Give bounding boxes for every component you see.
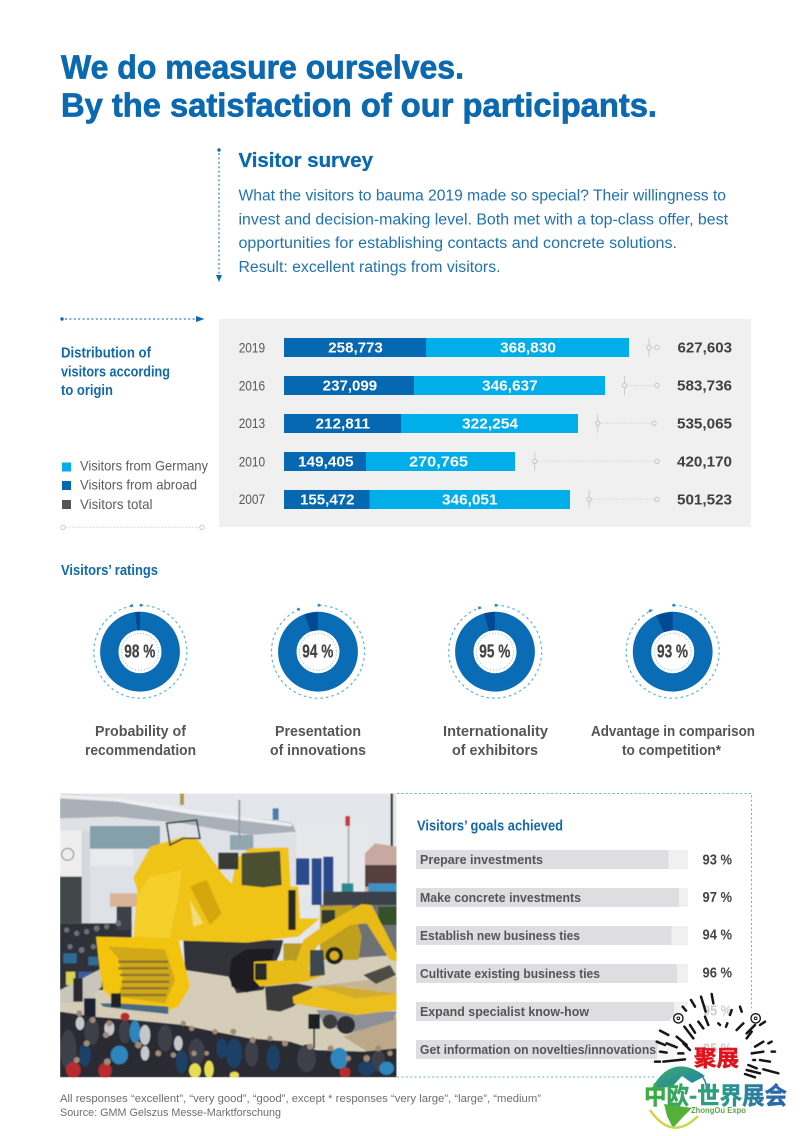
legend: Visitors from Germany bbox=[80, 458, 208, 474]
goal: information on novelties: Get information on novelties/innovations bbox=[420, 1042, 656, 1057]
goal: make concrete investments: 97 % bbox=[702, 889, 732, 906]
footnote: Source: GMM Gelszus Messe-Marktforschung bbox=[60, 1107, 281, 1119]
goal: expand specialist know-how: 95 % bbox=[703, 1003, 732, 1020]
bar row 2016: 237,099 bbox=[323, 378, 377, 395]
donut: 94% bbox=[270, 604, 366, 759]
heading: visitor survey: Visitor survey bbox=[238, 149, 374, 172]
body text: opportunities for establishing contacts and concrete solutions. bbox=[238, 235, 677, 252]
bar row 2013: 2013 bbox=[239, 415, 265, 431]
watermark: ZhongOu Expo logo: ZhongOu Expo bbox=[691, 1105, 746, 1115]
bar row 2007: 155,472 bbox=[300, 492, 354, 509]
bar row 2013: 322,254 bbox=[462, 416, 519, 433]
heading: visitors' ratings: Visitors’ ratings bbox=[61, 563, 158, 579]
bar row 2007: 501,523 bbox=[677, 492, 732, 509]
goal: prepare investments bbox=[416, 850, 732, 869]
heading: goals: Visitors’ goals achieved bbox=[417, 819, 563, 835]
heading: distribution of visitors: to origin bbox=[61, 383, 113, 399]
arrow: vertical dotted bbox=[216, 148, 222, 282]
bar row 2010: 420,170 bbox=[677, 454, 732, 471]
panel: bar chart of visitors bbox=[219, 319, 751, 527]
bar row 2007: 346,051 bbox=[442, 492, 498, 509]
goal: prepare investments: 93 % bbox=[702, 852, 732, 869]
title: By the satisfaction of our participants. bbox=[61, 86, 657, 124]
bar row 2016: 346,637 bbox=[482, 378, 538, 395]
donut: 94%: 94 % bbox=[302, 642, 333, 662]
bar row 2019: 258,773 bbox=[328, 340, 383, 357]
legend: Visitors total bbox=[80, 496, 152, 512]
goal: cultivate existing business ties: 96 % bbox=[702, 965, 732, 982]
body text: What the visitors to bauma 2019 made so special? Their willingness to bbox=[238, 188, 726, 205]
trailer bbox=[317, 1010, 397, 1033]
title: We do measure ourselves. bbox=[61, 48, 464, 86]
goal: establish new business ties: Establish new business ties bbox=[420, 928, 580, 943]
bar row 2016: 2016 bbox=[239, 377, 265, 393]
goal: cultivate existing business ties bbox=[416, 964, 732, 983]
donut: 98%: recommendation bbox=[85, 743, 196, 759]
bar row 2010 bbox=[239, 452, 732, 471]
text block: visitor survey bbox=[238, 149, 729, 276]
bar row 2016: 583,736 bbox=[677, 378, 732, 395]
donut: 93% bbox=[591, 604, 755, 759]
heading: distribution of visitors: Distribution of bbox=[61, 345, 151, 361]
donut: 95% bbox=[443, 604, 548, 759]
bar row 2019: 368,830 bbox=[500, 340, 556, 357]
donut: 94%: Presentation bbox=[275, 724, 361, 740]
donut: 95%: of exhibitors bbox=[452, 743, 538, 759]
bar row 2019: 627,603 bbox=[678, 340, 732, 357]
photo: yellow excavators and crowd bbox=[60, 793, 397, 1079]
bar row 2010: 2010 bbox=[239, 453, 265, 469]
watermark: ZhongOu Expo logo: 中欧-世界展会 bbox=[644, 1076, 787, 1111]
bar row 2013 bbox=[239, 414, 732, 433]
donut: 95%: 95 % bbox=[479, 642, 510, 662]
left crowd bbox=[60, 923, 132, 990]
main excavator bbox=[183, 940, 283, 993]
heading: distribution of visitors bbox=[61, 345, 170, 399]
donut: 93%: 93 % bbox=[657, 642, 688, 662]
bar row 2010: 149,405 bbox=[298, 454, 354, 471]
donut: 93%: to competition* bbox=[622, 743, 721, 759]
footnote: All responses “excellent”, “very good”, “good”, except * responses “very large”, “large”, “medium” bbox=[60, 1093, 541, 1105]
ground bbox=[60, 955, 397, 1057]
bar row 2010: 270,765 bbox=[409, 454, 468, 471]
watermark: radial code badge: 聚展 bbox=[694, 1041, 739, 1073]
goal: expand specialist know-how bbox=[416, 1002, 732, 1021]
donut: 98% bbox=[85, 604, 196, 759]
goal: establish new business ties bbox=[416, 926, 732, 945]
small excavator bbox=[265, 983, 313, 1012]
donut: 94%: of innovations bbox=[270, 743, 366, 759]
watermark: ZhongOu Expo logo bbox=[644, 1066, 788, 1128]
goal: prepare investments: Prepare investments bbox=[420, 852, 543, 867]
arrow: horizontal dotted bbox=[60, 316, 204, 322]
goal: make concrete investments: Make concrete investments bbox=[420, 890, 581, 905]
donut: 98%: 98 % bbox=[124, 642, 155, 662]
goal: information on novelties bbox=[416, 1040, 732, 1059]
bar row 2013: 212,811 bbox=[316, 416, 370, 433]
watermark: radial code badge bbox=[655, 994, 778, 1117]
goal: expand specialist know-how: Expand specialist know-how bbox=[420, 1004, 590, 1019]
goal: information on novelties: 95 % bbox=[703, 1041, 732, 1058]
donut: 93%: Advantage in comparison bbox=[591, 724, 755, 740]
body text: invest and decision-making level. Both met with a top-class offer, best bbox=[238, 211, 729, 228]
legend bbox=[61, 458, 208, 530]
legend: Visitors from abroad bbox=[80, 477, 197, 493]
goal: establish new business ties: 94 % bbox=[702, 927, 732, 944]
panel: visitors' goals achieved bbox=[397, 794, 752, 1077]
bar row 2013: 535,065 bbox=[677, 416, 732, 433]
bar row 2016 bbox=[239, 376, 732, 395]
front crowd bbox=[60, 1012, 397, 1077]
bar row 2007: 2007 bbox=[239, 491, 265, 507]
title bbox=[61, 48, 657, 124]
heading: distribution of visitors: visitors according bbox=[61, 364, 170, 380]
donut: 98%: Probability of bbox=[95, 724, 186, 740]
bar row 2019: 2019 bbox=[239, 339, 265, 355]
body text: Result: excellent ratings from visitors. bbox=[238, 259, 500, 276]
footnote bbox=[60, 1093, 541, 1119]
bar row 2019 bbox=[239, 338, 732, 357]
goal: make concrete investments bbox=[416, 888, 732, 907]
body text bbox=[238, 188, 729, 276]
bar row 2007 bbox=[239, 490, 732, 509]
donut: 95%: Internationality bbox=[443, 724, 548, 740]
wheel loader behind bbox=[320, 905, 362, 960]
goal: cultivate existing business ties: Cultivate existing business ties bbox=[420, 966, 600, 981]
